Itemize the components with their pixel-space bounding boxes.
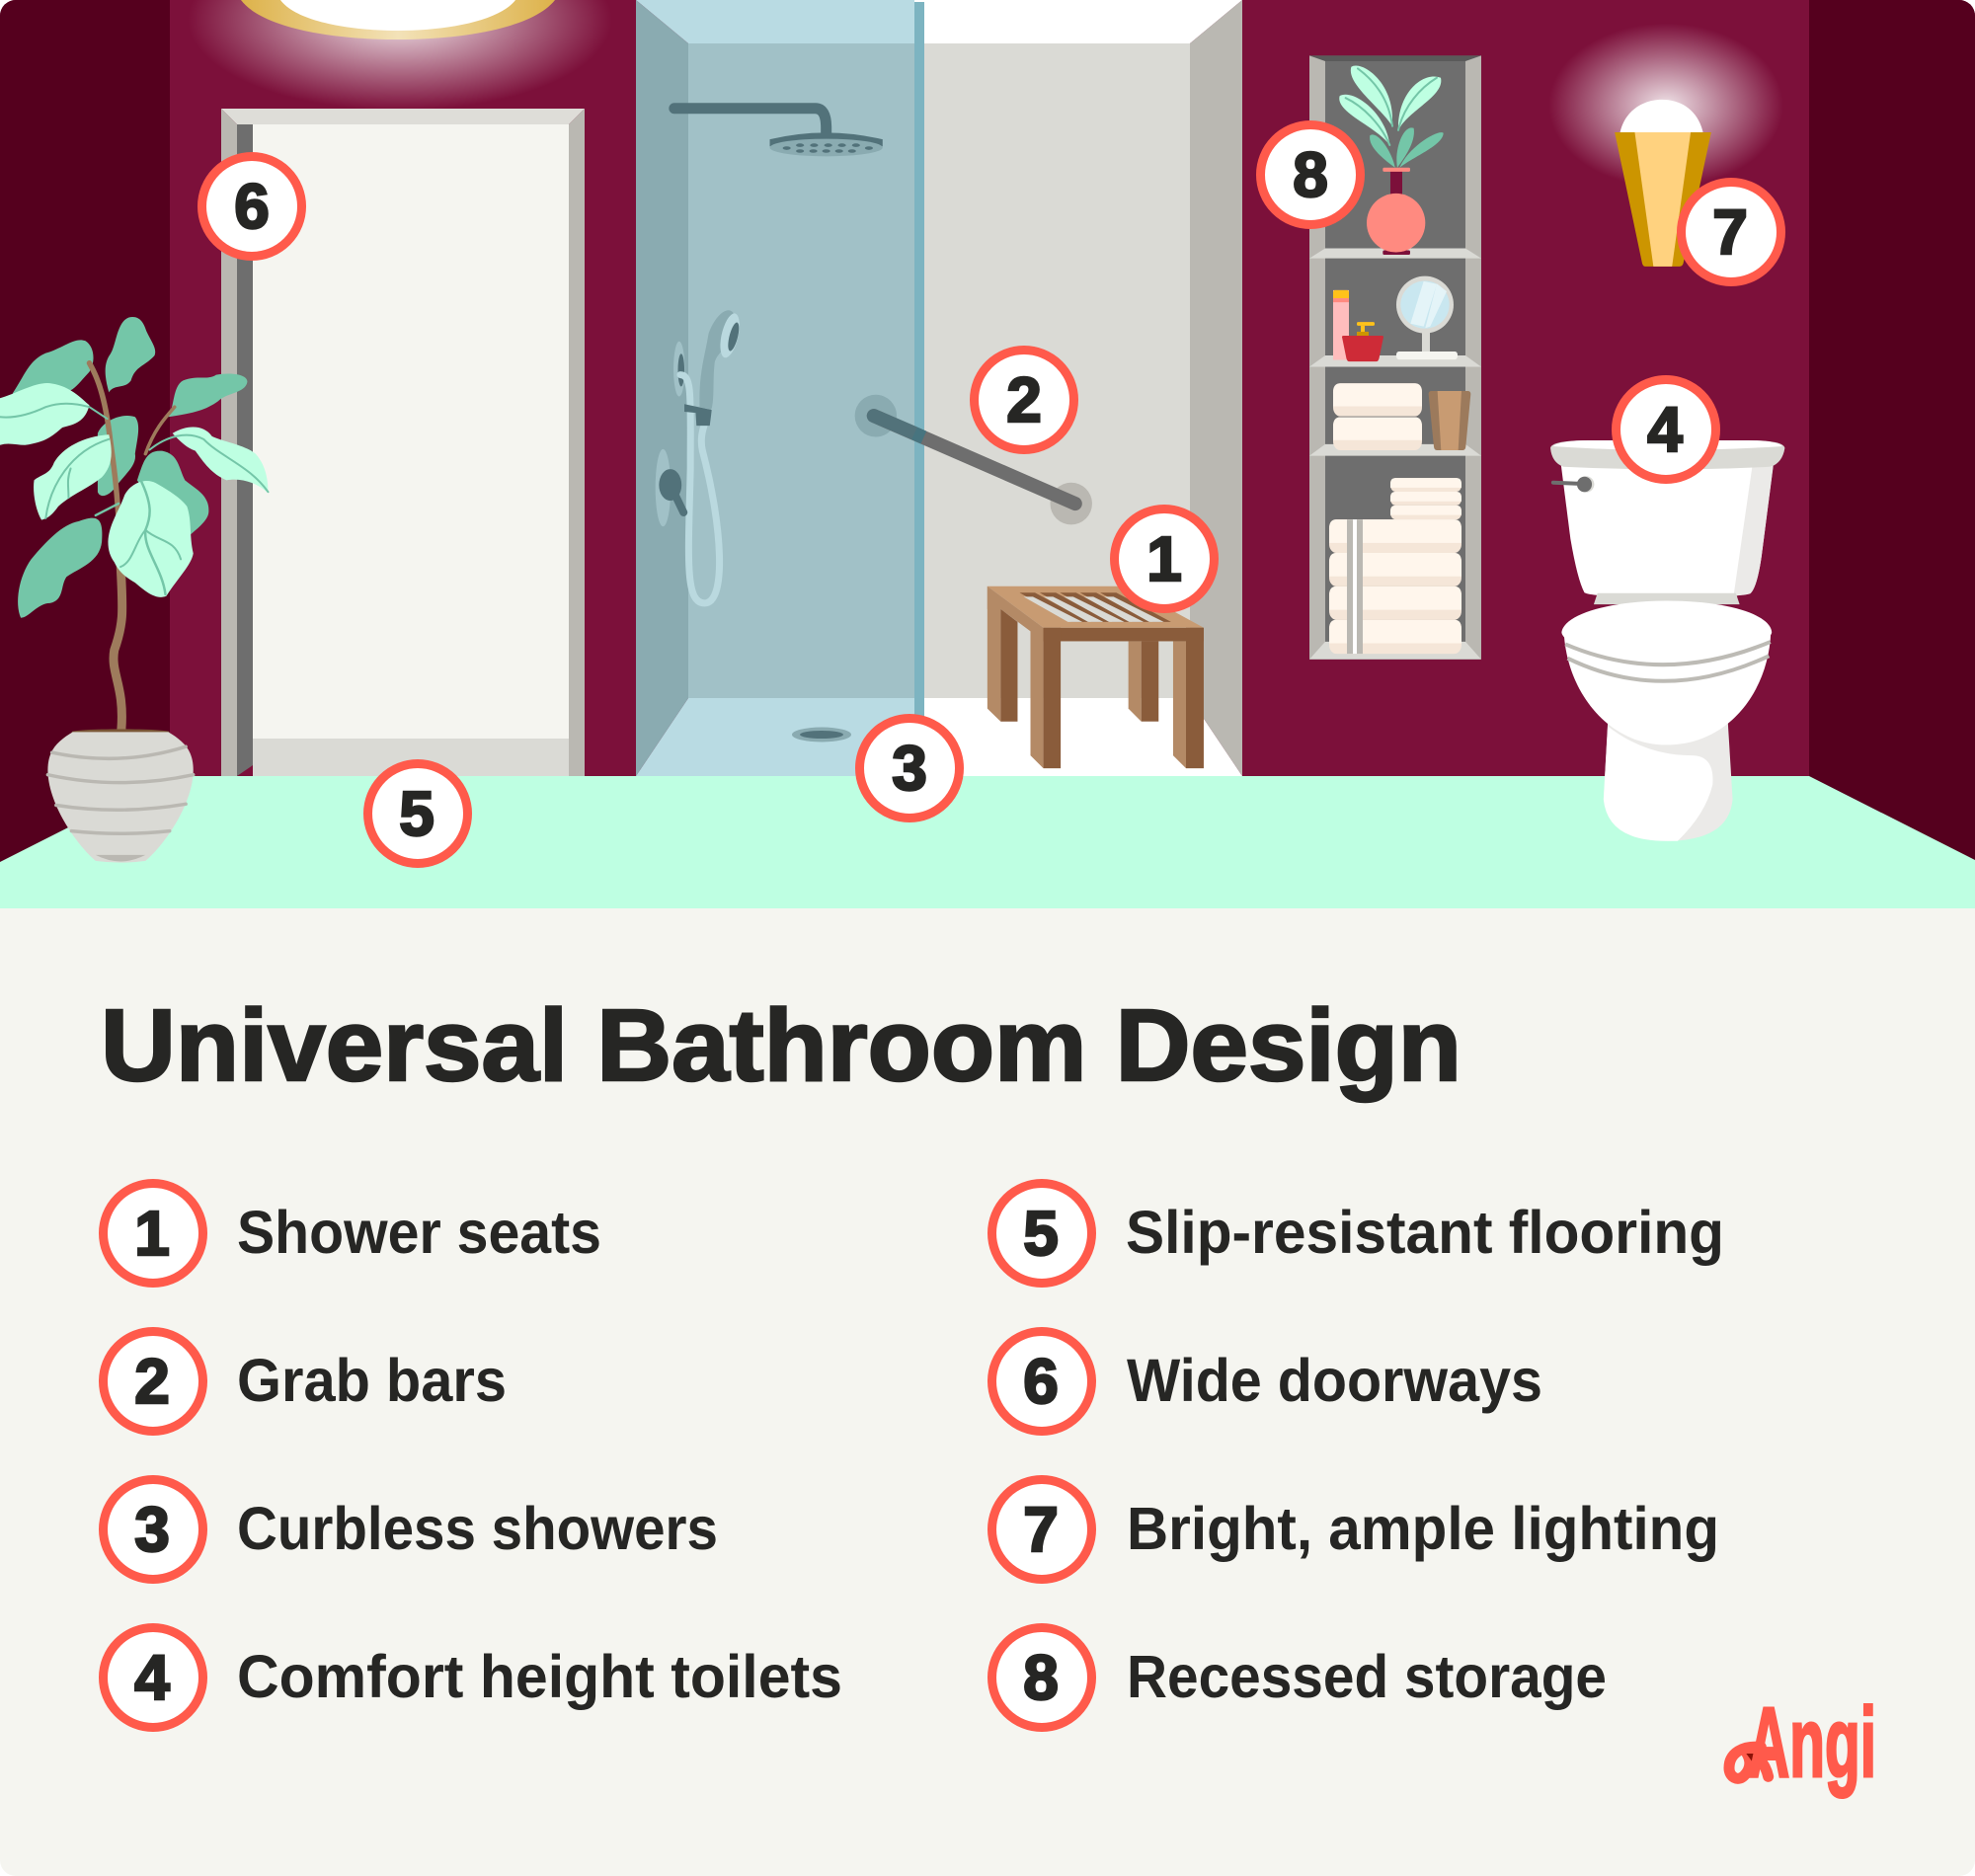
- badge 6: [201, 156, 302, 257]
- legend item 4: 4: [134, 1642, 170, 1713]
- legend item 8: [991, 1627, 1607, 1728]
- toiletries and mirror: [1333, 276, 1458, 361]
- badge 1: [1114, 509, 1215, 608]
- badge 3: [859, 719, 960, 818]
- rain shower head: [674, 109, 883, 156]
- shower ceiling opening: [914, 0, 1242, 43]
- potted plant: [0, 317, 268, 863]
- recessed storage niche: [1309, 55, 1481, 660]
- Angi logo: Angi: [1748, 1687, 1876, 1798]
- legend item 2: 2: [134, 1346, 170, 1417]
- badge 2: [974, 350, 1074, 450]
- toilet base: [1604, 723, 1733, 841]
- badge 5: [367, 764, 468, 863]
- shower right wall: [1190, 0, 1242, 776]
- left side wall: [0, 0, 170, 869]
- badge 7: [1681, 182, 1781, 282]
- shower seat: [988, 586, 1204, 768]
- badge 4: [1616, 379, 1716, 480]
- legend item 5: Slip-resistant flooring: [1126, 1199, 1724, 1266]
- legend item 5: [991, 1183, 1724, 1284]
- toilet tank: [1550, 440, 1784, 597]
- handheld shower and valve: [656, 309, 744, 603]
- legend item 5: 5: [1023, 1198, 1059, 1269]
- right side wall: [1809, 0, 1975, 869]
- Angi logo: [1729, 1687, 1876, 1798]
- legend item 2: [103, 1331, 507, 1432]
- legend item 8: 8: [1023, 1642, 1059, 1713]
- legend item 7: Bright, ample lighting: [1127, 1495, 1719, 1562]
- glass panel: [636, 0, 924, 776]
- back wall: [0, 0, 1975, 780]
- badge 8: 8: [1293, 139, 1328, 210]
- floor: [0, 776, 1975, 908]
- badge 8: [1260, 124, 1361, 225]
- badge 5: 5: [399, 778, 434, 849]
- legend item 1: Shower seats: [237, 1199, 601, 1266]
- badge 3: 3: [892, 733, 927, 804]
- legend item 6: Wide doorways: [1127, 1347, 1542, 1414]
- bathroom scene: [0, 0, 1975, 908]
- legend item 7: 7: [1023, 1494, 1059, 1565]
- grab bar: [855, 395, 1092, 524]
- curbless shower: [636, 0, 1242, 776]
- legend item 7: [991, 1479, 1719, 1580]
- legend item 2: Grab bars: [237, 1347, 507, 1414]
- wide doorway: [221, 109, 585, 776]
- legend item 3: [103, 1479, 718, 1580]
- badge 4: 4: [1647, 394, 1683, 465]
- legend item 1: 1: [134, 1198, 170, 1269]
- legend item 8: Recessed storage: [1127, 1643, 1607, 1710]
- legend item 3: Curbless showers: [237, 1495, 718, 1562]
- badge 6: 6: [234, 171, 270, 242]
- legend item 4: [103, 1627, 842, 1728]
- shower back wall: [924, 43, 1190, 698]
- legend item 6: [991, 1331, 1542, 1432]
- ceiling light: [188, 0, 612, 111]
- vase with plant: [1339, 66, 1444, 255]
- badge 2: 2: [1006, 364, 1042, 435]
- title: Universal Bathroom Design: [101, 988, 1462, 1102]
- curbless shower floor: [914, 698, 1242, 776]
- legend item 1: [103, 1183, 601, 1284]
- badge 1: 1: [1146, 523, 1182, 594]
- badge 7: 7: [1712, 196, 1748, 268]
- toilet bowl: [1564, 633, 1771, 744]
- towels and basket: [1329, 383, 1470, 654]
- wall sconce: [1548, 24, 1783, 267]
- drain: [792, 727, 851, 743]
- comfort height toilet: [1550, 440, 1784, 841]
- legend item 6: 6: [1023, 1346, 1059, 1417]
- legend item 3: 3: [134, 1494, 170, 1565]
- legend item 4: Comfort height toilets: [237, 1643, 842, 1710]
